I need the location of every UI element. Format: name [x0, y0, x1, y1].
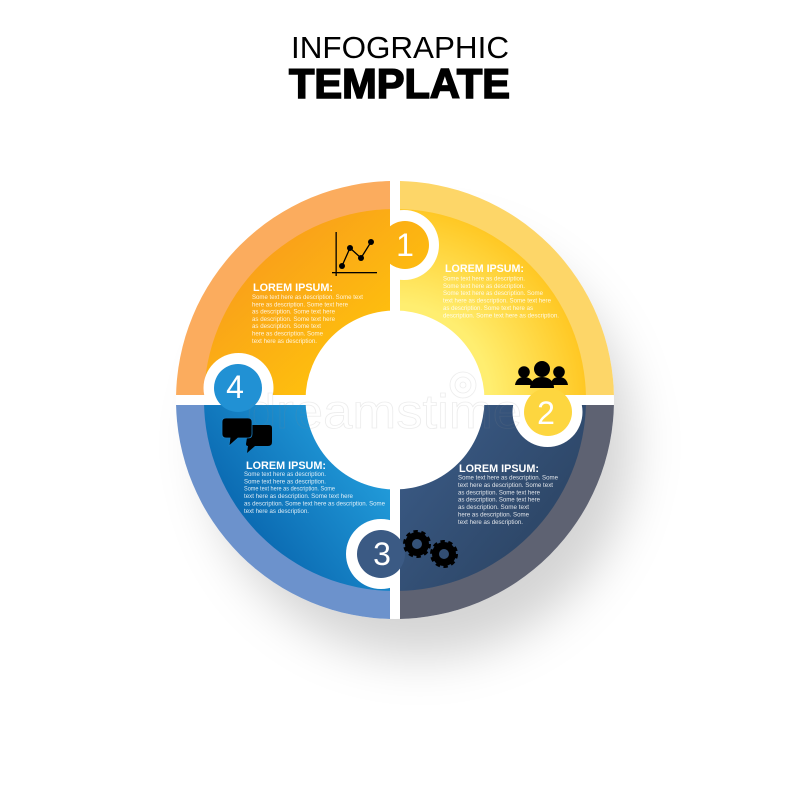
badge 1 [381, 221, 429, 269]
text block: blue: text here as description. [244, 508, 309, 515]
text block: navy: LOREM IPSUM: [459, 463, 539, 475]
text block: orange: here as description. Some [252, 330, 323, 338]
text block: navy: as description. Some text here [458, 497, 540, 504]
icon: speech bubbles [222, 418, 272, 453]
title: TEMPLATE [289, 60, 510, 107]
text block: orange: as description. Some text [252, 323, 321, 330]
text block: orange: Some text here as description. Some text [252, 294, 363, 301]
text block: navy: Some text here as description. Some [458, 475, 558, 482]
watermark: dreamstime [247, 386, 522, 439]
icon: gears [405, 532, 456, 566]
panel: orange quadrant [176, 181, 390, 395]
text block: yellow: Some text here as description. [443, 276, 525, 282]
icon: people [515, 361, 568, 388]
badge 4: 4 [226, 369, 244, 405]
badge ring cutouts [204, 210, 582, 589]
badge 3 [357, 530, 405, 578]
text block: blue: as description. Some text here as description. Some [244, 501, 385, 508]
title [289, 30, 510, 107]
badge 2: 2 [537, 395, 555, 431]
panel: blue quadrant [176, 405, 390, 619]
title: INFOGRAPHIC [291, 30, 509, 65]
drop shadow [208, 233, 632, 657]
text block: blue: Some text here as description. [244, 478, 326, 485]
badge 3: 3 [373, 536, 391, 572]
text block: yellow: as description. Some text here as [443, 305, 534, 312]
text block: yellow: Some text here as description. Some [443, 290, 543, 297]
icon: line chart [332, 232, 377, 276]
text block: orange: here as description. Some text here [252, 301, 348, 308]
text block: orange: text here as description. [252, 338, 317, 345]
badge 1: 1 [396, 227, 414, 263]
text block: blue: LOREM IPSUM: [246, 460, 326, 472]
text block: yellow: description. Some text here as description. [443, 312, 559, 319]
panel: navy quadrant [400, 405, 614, 619]
text block: navy: as description. Some text [458, 504, 529, 511]
badge 4 [214, 364, 262, 412]
text block: blue [244, 460, 385, 515]
panel: yellow quadrant [400, 181, 614, 395]
text block: orange [252, 282, 363, 345]
text block: yellow: Some text here as description. [443, 283, 525, 290]
text block: navy: text here as description. [458, 519, 523, 526]
text block: yellow: text here as description. Some text here [443, 298, 551, 304]
text block: navy: as description. Some text here [458, 489, 540, 496]
text block: yellow: LOREM IPSUM: [445, 263, 524, 275]
badge 2 [524, 388, 572, 436]
text block: orange: as description. Some text here [252, 316, 335, 323]
text block: blue: Some text here as description. Some [244, 486, 335, 493]
text block: orange: as description. Some text here [252, 309, 335, 316]
disc base [176, 181, 614, 619]
text block: navy [458, 463, 558, 526]
center hole [306, 310, 484, 490]
text block: blue: Some text here as description. [244, 471, 326, 478]
text block: yellow [443, 263, 559, 319]
text block: blue: text here as description. Some text here [244, 493, 353, 500]
text block: orange: LOREM IPSUM: [253, 282, 333, 294]
text block: navy: here as description. Some [458, 511, 529, 518]
text block: navy: text here as description. Some text [458, 482, 553, 489]
